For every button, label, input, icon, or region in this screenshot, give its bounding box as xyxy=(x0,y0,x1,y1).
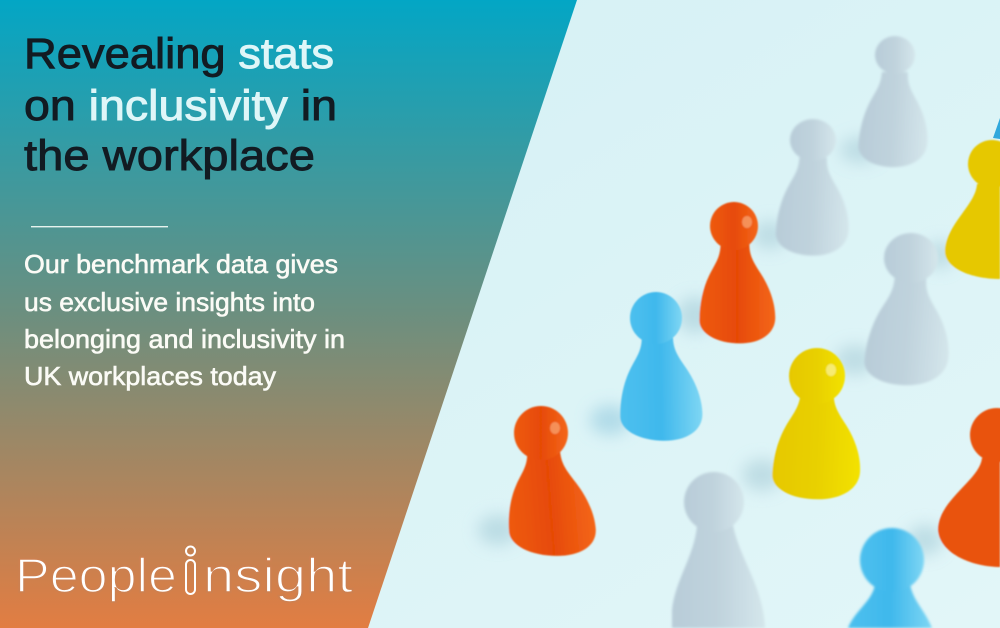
logo: PeopleInsight xyxy=(15,546,353,603)
pawn: blue edge xyxy=(993,118,1000,139)
pawn: grey upper middle xyxy=(752,119,852,256)
title: on inclusivity in xyxy=(24,82,337,130)
divider xyxy=(31,226,168,227)
pawn: yellow centre xyxy=(742,348,864,499)
logo: PeopleInsight: nsight xyxy=(203,550,353,603)
pawn: grey top xyxy=(840,36,931,167)
subheading text: Our benchmark data gives xyxy=(24,249,338,279)
pawn: grey bottom xyxy=(672,472,765,628)
title xyxy=(24,30,337,180)
pawn: blue xyxy=(590,292,703,441)
pawn: red right xyxy=(907,408,1000,567)
pawn: grey middle right xyxy=(835,233,955,385)
subheading text: UK workplaces today xyxy=(24,361,276,391)
pawn: red upper xyxy=(677,202,775,343)
logo: PeopleInsight: People xyxy=(15,550,177,603)
subheading text: us exclusive insights into xyxy=(24,287,315,317)
subheading text: belonging and inclusivity in xyxy=(24,324,345,354)
title: Revealing stats xyxy=(24,30,334,78)
subheading text xyxy=(24,249,345,391)
pawn: yellow right xyxy=(926,140,1000,279)
pawn: red lower left xyxy=(478,406,598,556)
title: the workplace xyxy=(24,132,315,180)
pawn: blue bottom xyxy=(848,528,932,628)
panel: gradient diagonal xyxy=(0,0,577,628)
